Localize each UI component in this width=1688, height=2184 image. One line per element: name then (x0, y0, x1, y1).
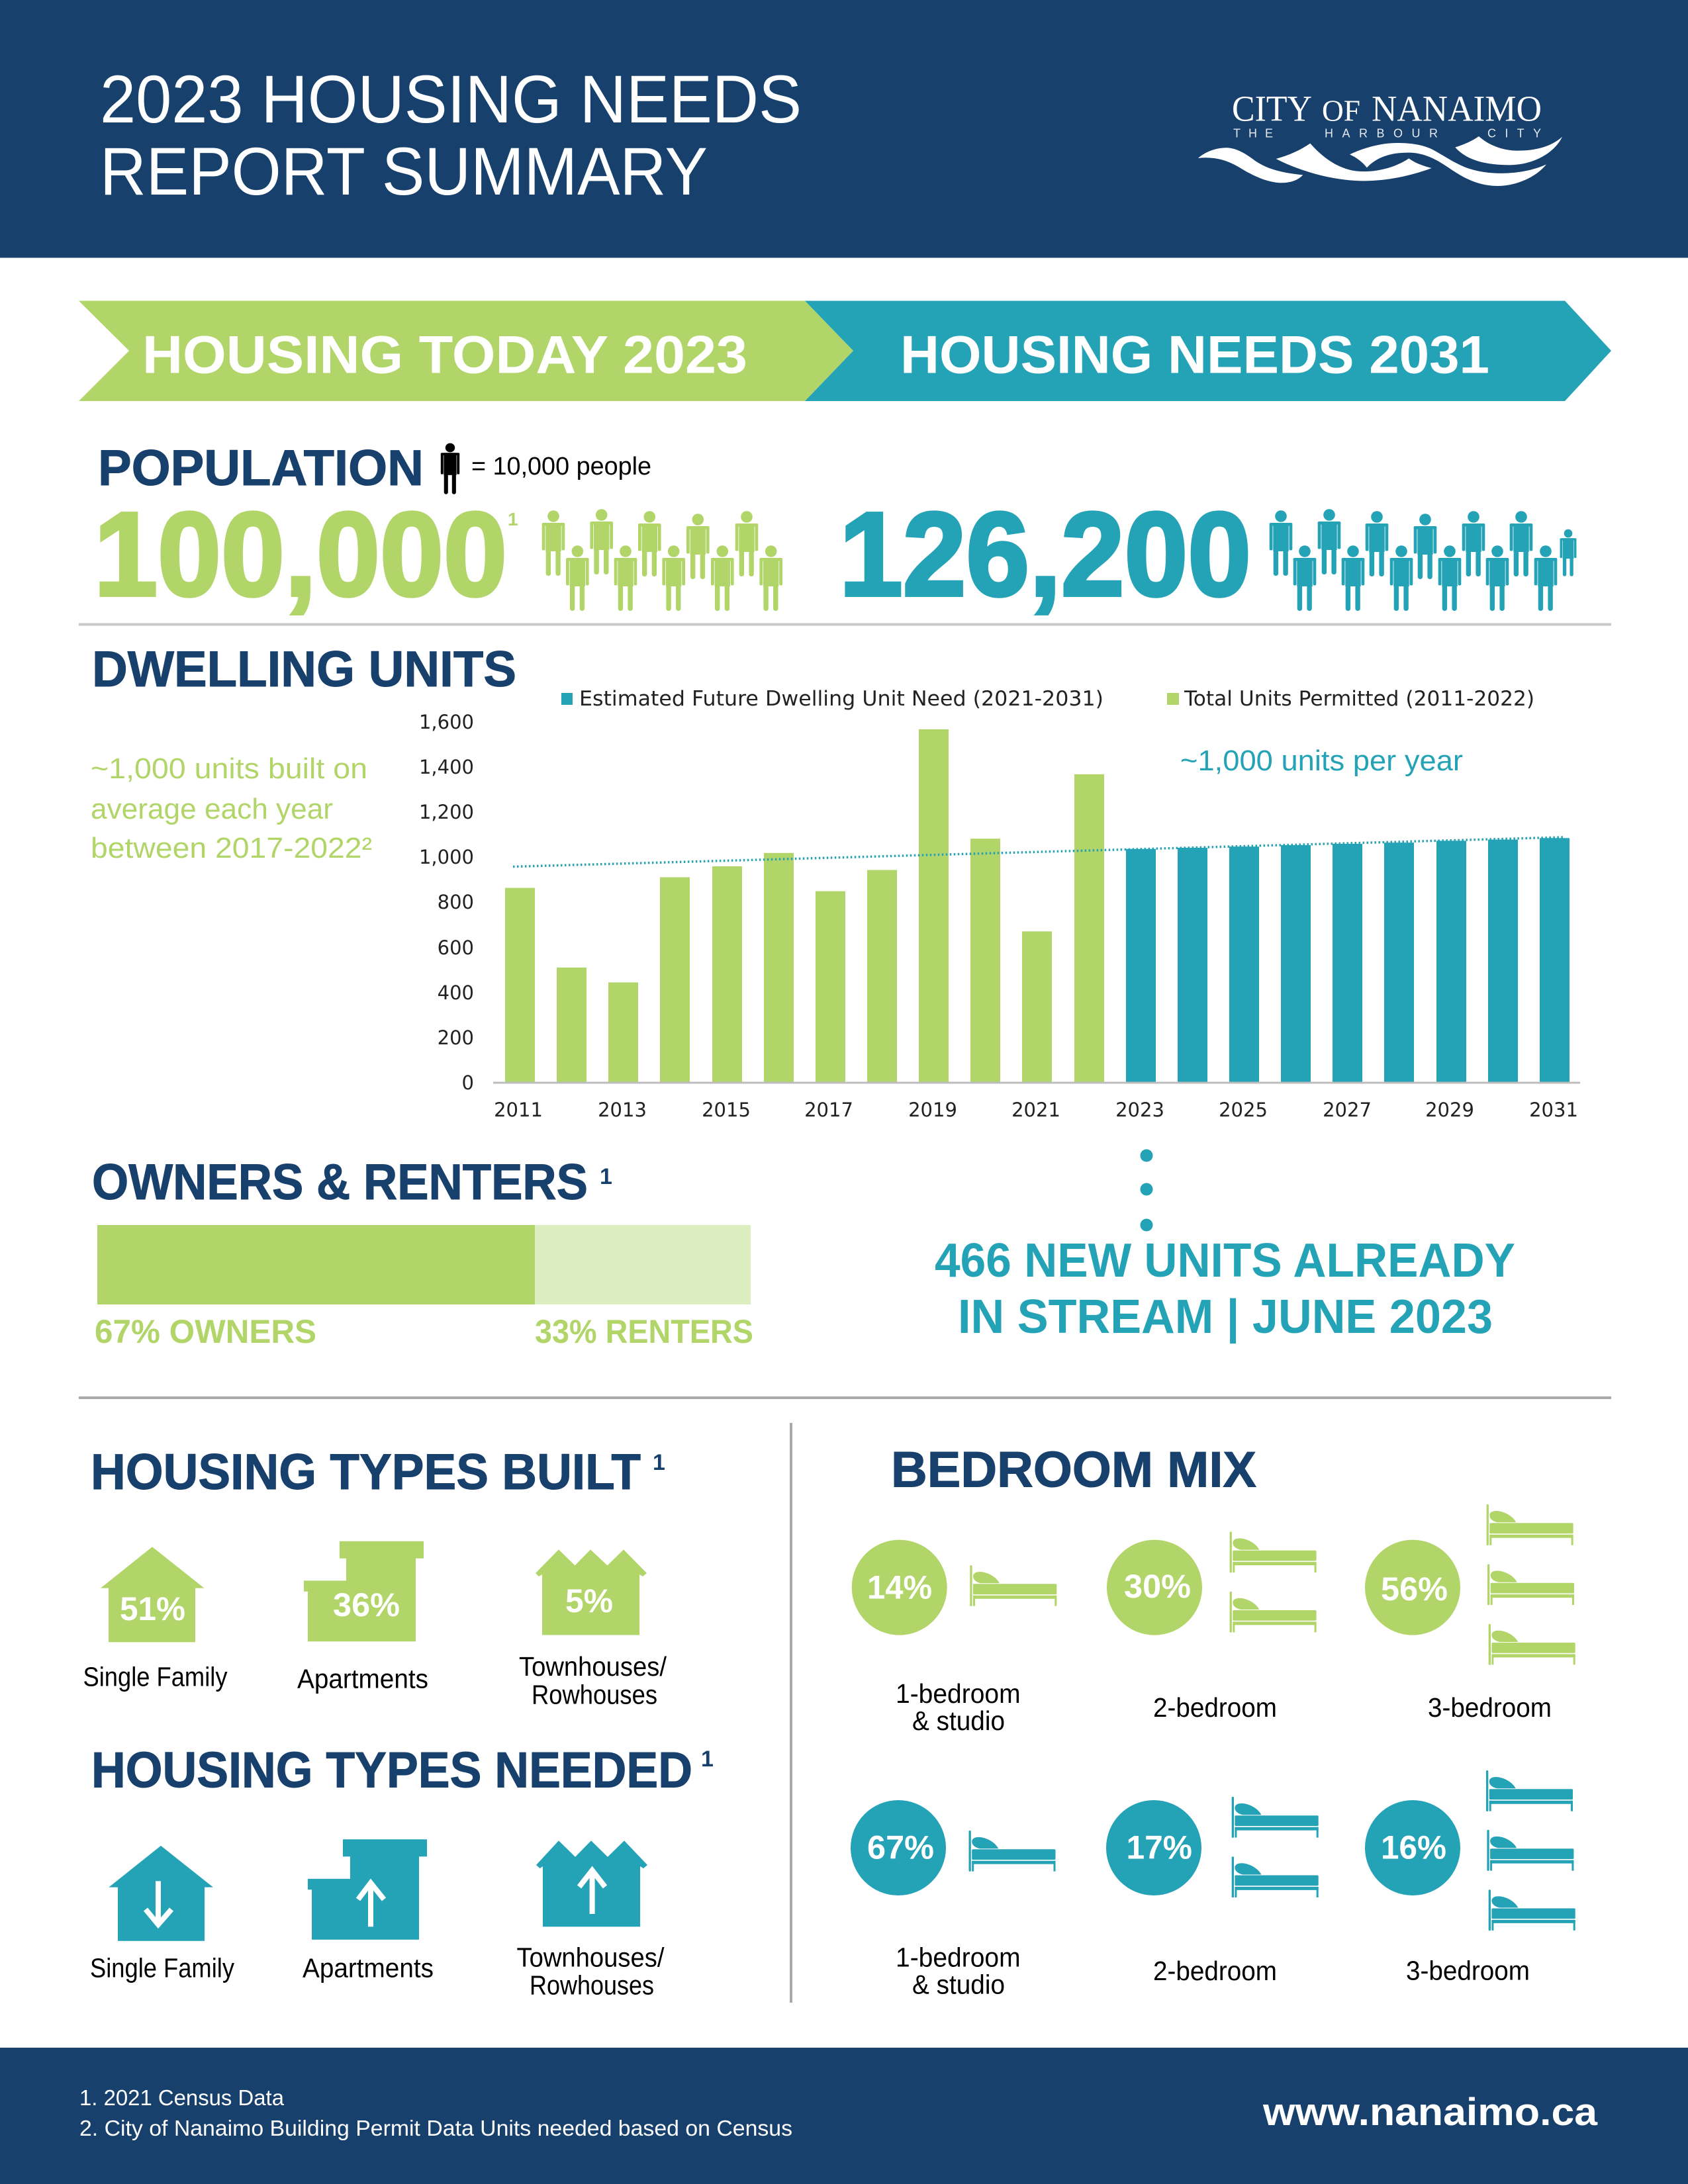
population today number: 100,000 (94, 488, 507, 621)
label: 1-bedroom and studio: & studio (912, 1706, 1005, 1736)
ribbon: housing needs 2031 (805, 300, 1611, 401)
title: 2023 HOUSING NEEDS (100, 62, 802, 137)
trend line (513, 837, 1563, 867)
icon: apartments built (304, 1541, 424, 1641)
population 2031 number: 126,200 (839, 488, 1251, 621)
footnotes (79, 2085, 792, 2140)
logo: City of Nanaimo: CITY (1232, 89, 1312, 129)
bedroom needed: 1-bedroom (851, 1800, 1055, 1895)
bedroom needed: 3-bedroom: 16% (1381, 1829, 1446, 1866)
population heading: POPULATION (98, 440, 424, 496)
icon: apartments built: 36% (333, 1586, 400, 1623)
title (100, 62, 802, 209)
dotted connector (1140, 1149, 1153, 1231)
owners and renters heading: OWNERS & RENTERS (92, 1154, 588, 1210)
icon: single family built (101, 1547, 204, 1642)
label: 1-bedroom and studio: 1-bedroom (896, 1942, 1021, 1972)
legend: 10,000 people: = 10,000 people (471, 453, 651, 480)
footnote marker: 1 (701, 1747, 714, 1772)
dwelling units note: average each year (91, 793, 333, 825)
bedroom today: 1-bedroom: 14% (867, 1569, 932, 1606)
label: 2-bedroom: 2-bedroom (1153, 1956, 1277, 1986)
label: 1-bedroom and studio (896, 1678, 1021, 1736)
permitted bars (505, 729, 1104, 1082)
logo: City of Nanaimo: CITY (1487, 127, 1541, 140)
icon: person legend (441, 443, 459, 494)
icon: teal people (1270, 509, 1576, 611)
estimated need bars (1126, 838, 1570, 1082)
owners renters bar (97, 1225, 751, 1304)
owners label: 67% OWNERS (95, 1313, 316, 1350)
logo: City of Nanaimo: HARBOUR (1325, 127, 1438, 140)
logo: City of Nanaimo (1198, 89, 1562, 186)
x axis labels: 2019 (908, 1099, 957, 1121)
housing types built heading: HOUSING TYPES BUILT (91, 1444, 641, 1500)
x axis labels: 2027 (1323, 1099, 1372, 1121)
label: 1-bedroom and studio: & studio (912, 1969, 1005, 1999)
label: 3-bedroom: 3-bedroom (1406, 1955, 1530, 1985)
bedroom needed: 1-bedroom: 67% (867, 1829, 934, 1866)
x axis labels: 2021 (1011, 1099, 1060, 1121)
label: single family: Single Family (83, 1661, 228, 1692)
renters label: 33% RENTERS (535, 1313, 753, 1350)
y axis labels: 800 (438, 891, 474, 913)
label: townhouses: Rowhouses (532, 1680, 657, 1710)
x axis labels: 2013 (598, 1099, 647, 1121)
bedroom today: 1-bedroom (852, 1540, 1056, 1635)
callout: units per year: ~1,000 units per year (1180, 745, 1463, 777)
y axis labels: 1,400 (419, 756, 474, 778)
title: REPORT SUMMARY (100, 134, 708, 209)
label: townhouses (516, 1942, 665, 2000)
y axis labels (419, 711, 474, 1094)
icon: townhouses built (536, 1549, 647, 1635)
logo: City of Nanaimo: OF (1322, 94, 1360, 128)
label: townhouses: Townhouses/ (519, 1651, 667, 1682)
website: www.nanaimo.ca (1262, 2091, 1598, 2134)
y axis labels: 1,200 (419, 801, 474, 823)
footnotes: 2. City of Nanaimo Building Permit Data Units needed based on Census (79, 2116, 792, 2140)
ribbon: housing needs 2031: HOUSING NEEDS 2031 (900, 326, 1489, 385)
x axis labels: 2011 (494, 1099, 543, 1121)
bedroom today: 2-bedroom: 30% (1124, 1568, 1191, 1605)
bedroom mix heading: BEDROOM MIX (891, 1441, 1256, 1498)
x axis labels: 2029 (1425, 1099, 1474, 1121)
footnote marker: 1 (600, 1164, 612, 1189)
ribbon: housing today 2023: HOUSING TODAY 2023 (142, 326, 747, 385)
icon: green people (542, 509, 782, 611)
icon: single family needed (109, 1846, 213, 1941)
icon: apartments needed (308, 1839, 427, 1940)
icon: single family built: 51% (120, 1590, 185, 1627)
ribbon: housing today 2023 (79, 300, 853, 401)
footnote marker: 1 (653, 1450, 665, 1475)
x axis labels: 2015 (702, 1099, 751, 1121)
chart legend: Total Units Permitted (2011-2022) (1184, 687, 1534, 711)
bedroom needed: 2-bedroom: 17% (1127, 1829, 1192, 1866)
logo: City of Nanaimo: NANAIMO (1372, 89, 1542, 129)
y axis labels: 1,600 (419, 711, 474, 733)
x axis labels: 2025 (1219, 1099, 1268, 1121)
label: 3-bedroom: 3-bedroom (1428, 1692, 1552, 1723)
label: single family: Single Family (90, 1952, 234, 1983)
x axis labels (494, 1099, 1578, 1121)
label: apartments: Apartments (303, 1952, 434, 1983)
bedroom today: 3-bedroom: 56% (1381, 1570, 1448, 1608)
dwelling units note (91, 752, 372, 864)
chart legend: Estimated Future Dwelling Unit Need (2021-2031) (579, 687, 1103, 711)
bedroom needed: 2-bedroom (1106, 1797, 1319, 1897)
label: 1-bedroom and studio (896, 1942, 1021, 1999)
dwelling units note: ~1,000 units built on (91, 752, 367, 785)
y axis labels: 1,000 (419, 846, 474, 868)
footer (0, 2048, 1688, 2184)
callout: units in stream: IN STREAM | JUNE 2023 (958, 1291, 1493, 1343)
label: townhouses: Rowhouses (530, 1970, 654, 2000)
x axis labels: 2023 (1115, 1099, 1164, 1121)
bedroom today: 3-bedroom (1365, 1504, 1575, 1665)
y axis labels: 400 (438, 981, 474, 1004)
callout: units in stream (935, 1234, 1515, 1343)
header banner (0, 0, 1688, 258)
icon: townhouses needed (536, 1841, 647, 1927)
logo: City of Nanaimo: THE (1233, 127, 1273, 140)
bedroom today: 2-bedroom (1107, 1531, 1317, 1635)
label: townhouses: Townhouses/ (516, 1942, 665, 1972)
dwelling units heading: DWELLING UNITS (92, 641, 516, 698)
dwelling units note: between 2017-2022² (91, 832, 372, 864)
chart legend (561, 687, 1534, 711)
y axis labels: 0 (462, 1071, 474, 1094)
x axis labels: 2031 (1529, 1099, 1578, 1121)
y axis labels: 200 (438, 1026, 474, 1049)
footnote marker: 1 (508, 509, 518, 529)
x axis labels: 2017 (804, 1099, 853, 1121)
bar chart: dwelling units (419, 711, 1580, 1121)
footnotes: 1. 2021 Census Data (79, 2085, 285, 2110)
y axis labels: 600 (438, 936, 474, 959)
label: townhouses (519, 1651, 667, 1710)
bedroom needed: 3-bedroom (1365, 1770, 1575, 1931)
housing types needed heading: HOUSING TYPES NEEDED (91, 1743, 692, 1799)
icon: townhouses built: 5% (565, 1582, 613, 1619)
label: apartments: Apartments (297, 1664, 428, 1694)
label: 2-bedroom: 2-bedroom (1153, 1692, 1277, 1723)
label: 1-bedroom and studio: 1-bedroom (896, 1678, 1021, 1709)
callout: units in stream: 466 NEW UNITS ALREADY (935, 1234, 1515, 1287)
